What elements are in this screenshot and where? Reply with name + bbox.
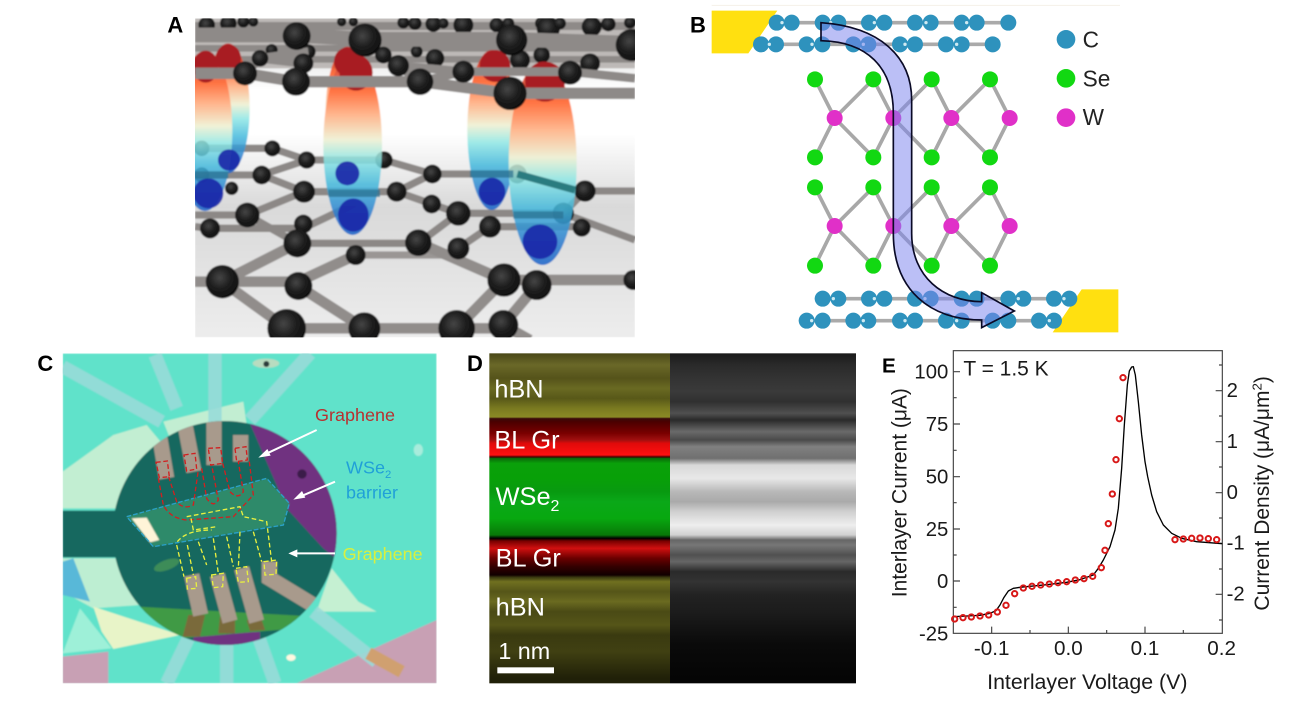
scale bar: 1 nm <box>498 638 550 664</box>
layer labels: WSe <box>496 483 551 511</box>
left axis numbers: 100 <box>914 362 948 384</box>
arrow: to top graphene <box>258 430 317 458</box>
panel E: current-voltage chart <box>882 351 1274 694</box>
upper graphene sheet front rows <box>195 22 648 110</box>
right axis numbers: 1 <box>1227 431 1238 453</box>
x axis numbers <box>974 637 1236 660</box>
panel B: atomic structure with current arrow <box>690 5 1120 332</box>
arrow: current path <box>821 23 1014 328</box>
layer labels: hBN <box>494 376 544 404</box>
left axis numbers: 50 <box>926 467 948 489</box>
greyscale image <box>670 353 856 683</box>
label B: B <box>690 13 706 38</box>
left axis title: Interlayer Current (μA) <box>889 388 912 597</box>
right axis title: Current Density (μA/μm <box>1251 390 1274 611</box>
right axis title: 2 <box>1250 383 1265 390</box>
right axis numbers: 2 <box>1227 380 1238 402</box>
measured data points <box>952 375 1219 622</box>
arrow: to WSe2 barrier <box>293 482 335 500</box>
graphene outline yellow <box>177 507 277 589</box>
panel C: optical micrograph of device <box>37 351 437 683</box>
label D: D <box>467 351 483 376</box>
annotation labels: barrier <box>346 482 398 502</box>
WSe2 lattice <box>807 71 1018 274</box>
x axis title: Interlayer Voltage (V) <box>987 670 1188 694</box>
right axis numbers: -2 <box>1227 584 1245 606</box>
graphene layers <box>753 15 1077 329</box>
scale bar <box>497 638 554 673</box>
colour map image <box>489 353 670 683</box>
layer labels: BL Gr <box>496 545 561 573</box>
label E: E <box>882 354 896 377</box>
legend <box>1057 26 1110 130</box>
graphene outline red <box>156 447 253 520</box>
right axis numbers <box>1227 380 1245 606</box>
fit curve <box>953 367 1222 617</box>
gold contact top-left <box>712 11 777 53</box>
arrow: to bottom graphene <box>288 549 335 557</box>
x axis numbers: 0.2 <box>1207 637 1236 660</box>
layer labels: 2 <box>551 498 560 515</box>
plot frame and ticks <box>953 351 1222 633</box>
left axis numbers: 0 <box>937 571 948 593</box>
left axis numbers: 75 <box>926 414 948 436</box>
legend: W <box>1083 104 1105 130</box>
legend: Se <box>1083 65 1110 91</box>
3D scene <box>195 18 635 338</box>
x axis numbers: -0.1 <box>974 637 1009 660</box>
legend: C <box>1083 26 1099 52</box>
x axis numbers: 0.0 <box>1054 637 1083 660</box>
annotation labels <box>315 405 423 564</box>
right axis numbers: 0 <box>1227 482 1238 504</box>
annotation labels: Graphene <box>315 405 395 425</box>
temperature note: T = 1.5 K <box>963 358 1049 381</box>
x axis numbers: 0.1 <box>1131 637 1159 660</box>
left axis numbers: 25 <box>926 519 948 541</box>
right axis title: ) <box>1251 376 1274 383</box>
top hairline <box>712 4 1120 7</box>
layer labels: BL Gr <box>494 426 560 454</box>
back rows of upper sheet <box>195 15 636 73</box>
annotation labels: WSe <box>346 457 385 477</box>
layer labels <box>494 376 561 622</box>
lower graphene sheet <box>194 140 643 348</box>
annotation labels: Graphene <box>343 544 423 564</box>
micrograph <box>63 353 437 683</box>
label C: C <box>37 351 53 376</box>
panel D: electron microscopy cross-section <box>467 351 856 683</box>
layer labels: hBN <box>496 594 545 622</box>
panel A: tunnelling orbitals between graphene sheets <box>167 13 648 348</box>
dark circular window <box>63 511 119 557</box>
left axis numbers: -25 <box>919 623 948 645</box>
annotation labels: 2 <box>385 469 391 481</box>
right axis numbers: -1 <box>1227 533 1245 555</box>
WSe2 flake <box>127 478 289 547</box>
orbitals <box>178 43 577 265</box>
label A: A <box>167 13 183 38</box>
gold contact bottom-right <box>1053 289 1118 332</box>
bonds seen through orbitals <box>517 174 575 190</box>
left axis numbers <box>914 362 948 645</box>
